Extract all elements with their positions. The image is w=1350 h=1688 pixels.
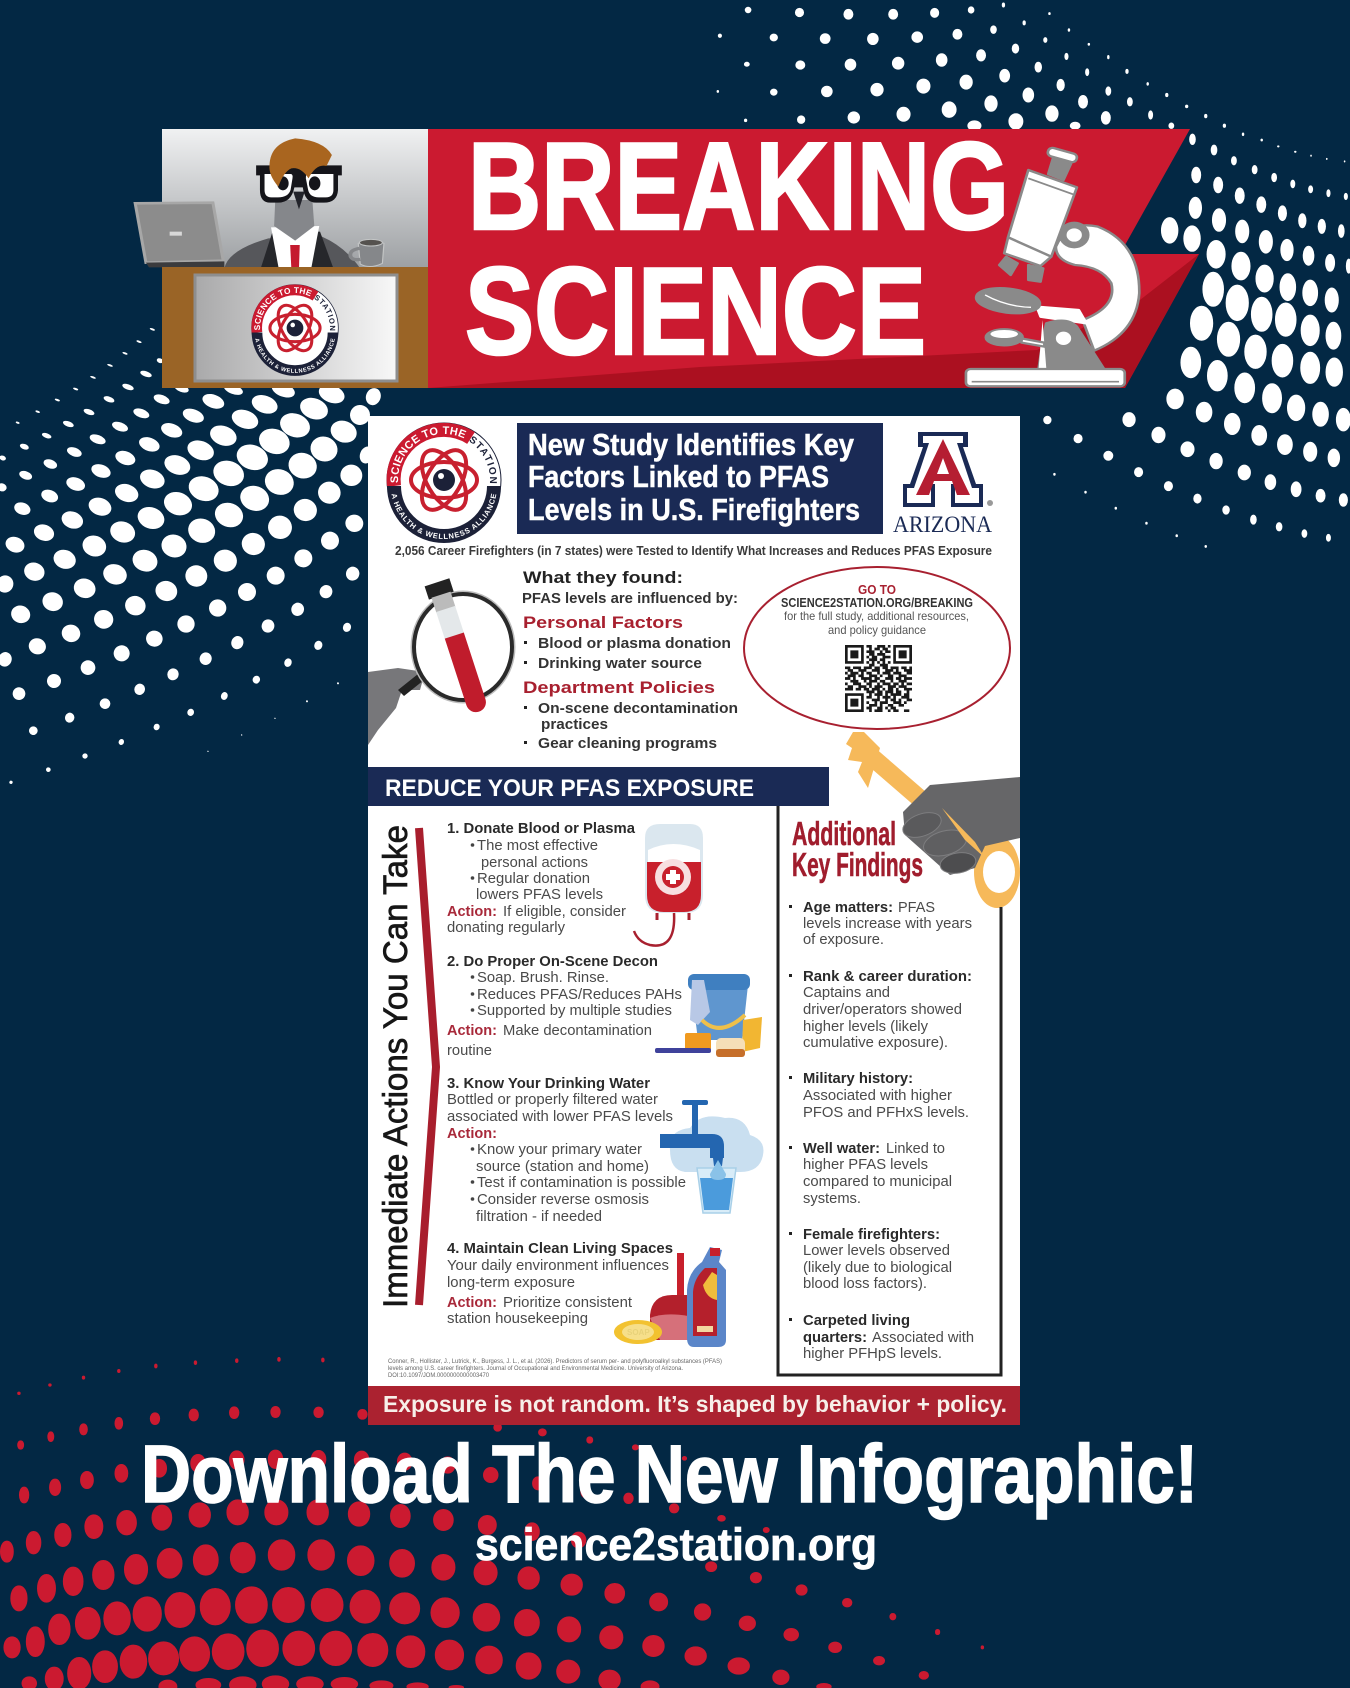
action 2: on-scene decon	[447, 954, 762, 1059]
text: what they found: Blood or plasma donation	[538, 636, 731, 652]
heading: additional key findings: Additional	[792, 815, 896, 852]
wooden desk	[162, 267, 428, 388]
finding: rank and career: Captains and	[803, 985, 890, 1001]
action 1: donate blood: Action:	[447, 904, 497, 920]
text: what they found: Personal Factors	[523, 613, 683, 632]
finding: rank and career	[789, 969, 972, 1051]
callout: go to link with QR	[744, 567, 1010, 729]
callout: go to link with QR: for the full study, additional resources,	[784, 609, 969, 623]
finding: carpeted living quarters	[789, 1313, 974, 1362]
finding: well water: Well water:	[803, 1141, 880, 1157]
finding: military history: Associated with higher	[803, 1088, 952, 1104]
icon: microscope	[966, 147, 1139, 386]
action 3: drinking water: source (station and home)	[476, 1159, 649, 1175]
action 4: clean living spaces: station housekeeping	[447, 1311, 588, 1327]
logo: Science to the Station: A HEALTH & WELLNESS ALLIANCE	[392, 494, 496, 539]
white halftone dots: left cluster	[0, 327, 383, 784]
action 3: drinking water: Consider reverse osmosis	[477, 1192, 649, 1208]
citation: Conner, R., Hollister, J., Lutrick, K., Burgess, J. L., et al. (2026). Predictors of serum per- and polyfluoroalkyl substances (PFAS)	[388, 1359, 722, 1365]
news anchor panel	[133, 129, 428, 388]
action 1: donate blood: donating regularly	[447, 920, 566, 936]
action 2: on-scene decon: 2. Do Proper On-Scene Decon	[447, 954, 658, 970]
action 3: drinking water: 3. Know Your Drinking Water	[447, 1076, 650, 1092]
text: what they found: practices	[541, 717, 608, 733]
white halftone dots: right cluster	[717, 3, 1350, 547]
red banner ribbon	[428, 129, 1199, 388]
action 3: drinking water: associated with lower PFAS levels	[447, 1109, 673, 1125]
text: what they found: On-scene decontamination	[538, 701, 738, 717]
finding: carpeted living quarters: Associated with	[872, 1330, 974, 1346]
logo: Science to the Station: SCIENCE TO THE	[390, 426, 466, 483]
action 3: drinking water: Know your primary water	[477, 1142, 642, 1158]
action 1: donate blood: If eligible, consider	[503, 904, 626, 920]
action 3: drinking water: filtration - if needed	[476, 1209, 602, 1225]
finding: rank and career: higher levels (likely	[803, 1019, 929, 1035]
finding: age matters: levels increase with years	[803, 916, 972, 932]
text: what they found: Department Policies	[523, 678, 715, 697]
logo: University of Arizona: ARIZONA	[893, 512, 992, 537]
icon: blood bag	[634, 824, 703, 946]
text: what they found: PFAS levels are influenced by:	[522, 591, 738, 607]
finding: rank and career: driver/operators showed	[803, 1002, 962, 1018]
action 1: donate blood: 1. Donate Blood or Plasma	[447, 821, 636, 837]
text: what they found: What they found:	[523, 568, 683, 587]
action 4: clean living spaces: long-term exposure	[447, 1275, 575, 1291]
icon: gold key in gray hand	[846, 732, 1020, 908]
finding: well water: compared to municipal	[803, 1174, 952, 1190]
action 3: drinking water: Action:	[447, 1126, 497, 1142]
action 4: clean living spaces	[447, 1241, 726, 1347]
finding: carpeted living quarters: Carpeted living	[803, 1313, 910, 1329]
finding: carpeted living quarters: quarters:	[803, 1330, 867, 1346]
action 3: drinking water	[447, 1076, 763, 1225]
logo: University of Arizona	[893, 432, 993, 537]
infographic card	[368, 416, 1020, 1425]
subtitle: 2,056 Career Firefighters (in 7 states) were Tested to Identify What Increases and Reduces PFAS Exposure	[395, 544, 992, 558]
callout: go to link with QR: SCIENCE2STATION.ORG/BREAKING	[781, 596, 973, 610]
finding: age matters: PFAS	[898, 900, 935, 916]
citation	[388, 1359, 722, 1379]
action 2: on-scene decon: Soap. Brush. Rinse.	[477, 970, 609, 986]
citation: levels among U.S. career firefighters. Journal of Occupational and Environmental Medicine. University of Arizona.	[388, 1366, 683, 1372]
title block: Factors Linked to PFAS	[528, 459, 829, 494]
action 2: on-scene decon: Make decontamination	[503, 1023, 652, 1039]
finding: well water	[789, 1141, 952, 1207]
callout: go to link with QR: GO TO	[858, 583, 896, 597]
text: what they found: Drinking water source	[538, 656, 702, 672]
icon: cleaning products: SOAP	[627, 1328, 650, 1337]
finding: well water: higher PFAS levels	[803, 1157, 928, 1173]
action 2: on-scene decon: Supported by multiple studies	[477, 1003, 672, 1019]
finding: female firefighters: Lower levels observed	[803, 1243, 950, 1259]
icon: pigeon news anchor with laptop and mug	[135, 138, 384, 268]
title block: Levels in U.S. Firefighters	[528, 492, 860, 527]
QR code	[845, 645, 912, 712]
finding: age matters: Age matters:	[803, 900, 893, 916]
icon: bucket and cleaning supplies	[655, 974, 762, 1057]
action 2: on-scene decon: Action:	[447, 1023, 497, 1039]
finding: rank and career: cumulative exposure).	[803, 1035, 948, 1051]
text: what they found	[522, 568, 738, 752]
logo: Science to the Station on desk: STATION	[314, 295, 336, 330]
vertical heading: Immediate Actions You Can Take	[377, 825, 415, 1308]
finding: carpeted living quarters: higher PFHpS levels.	[803, 1346, 942, 1362]
finding: female firefighters: (likely due to biological	[803, 1260, 952, 1276]
action 4: clean living spaces: 4. Maintain Clean Living Spaces	[447, 1241, 673, 1257]
heading: additional key findings	[792, 815, 923, 883]
finding: female firefighters: blood loss factors).	[803, 1276, 927, 1292]
finding: military history: Military history:	[803, 1071, 913, 1087]
action 3: drinking water: Bottled or properly filtered water	[447, 1092, 658, 1108]
title block	[517, 423, 883, 534]
red halftone dots: bottom left cluster	[1, 1357, 983, 1688]
footer bar: Exposure is not random. It’s shaped by behavior + policy.	[383, 1391, 1007, 1417]
icon: faucet and glass of water	[660, 1100, 763, 1213]
action 3: drinking water: Test if contamination is possible	[477, 1175, 686, 1191]
website url: science2station.org	[475, 1519, 877, 1570]
title block: New Study Identifies Key	[528, 427, 855, 462]
action 2: on-scene decon: Reduces PFAS/Reduces PAHs	[477, 987, 682, 1003]
footer bar	[368, 1386, 1020, 1425]
action 1: donate blood: personal actions	[481, 855, 588, 871]
heading: additional key findings: Key Findings	[792, 846, 923, 883]
finding: female firefighters	[789, 1227, 952, 1292]
banner title: SCIENCE: SCIENCE	[465, 243, 926, 381]
banner title: BREAKING: BREAKING	[468, 118, 1009, 256]
action 4: clean living spaces: Prioritize consistent	[503, 1295, 632, 1311]
desk plaque	[195, 275, 397, 381]
action 1: donate blood	[447, 821, 703, 946]
action 1: donate blood: lowers PFAS levels	[476, 887, 603, 903]
logo: Science to the Station on desk: SCIENCE TO THE	[254, 287, 312, 330]
action 1: donate blood: The most effective	[477, 838, 598, 854]
icon: cleaning products	[614, 1247, 726, 1347]
finding: military history	[789, 1071, 969, 1121]
callout: go to link with QR: and policy guidance	[828, 623, 926, 637]
logo: Science to the Station	[386, 422, 502, 543]
finding: age matters	[789, 900, 972, 948]
section heading bar	[368, 767, 829, 806]
arrow: red chevron	[419, 828, 436, 1305]
section heading bar: REDUCE YOUR PFAS EXPOSURE	[385, 775, 754, 802]
finding: well water: systems.	[803, 1191, 861, 1207]
logo: Science to the Station: STATION	[470, 436, 497, 484]
studio backdrop	[162, 129, 428, 268]
text: what they found: Gear cleaning programs	[538, 736, 717, 752]
action 4: clean living spaces: Action:	[447, 1295, 497, 1311]
logo: Science to the Station on desk: A HEALTH & WELLNESS ALLIANCE	[255, 338, 335, 373]
action 4: clean living spaces: Your daily environment influences	[447, 1258, 669, 1274]
action 1: donate blood: Regular donation	[477, 871, 590, 887]
action 2: on-scene decon: routine	[447, 1043, 492, 1059]
icon: hand with magnifier over test tube	[368, 578, 514, 745]
finding: female firefighters: Female firefighters:	[803, 1227, 940, 1243]
citation: DOI:10.1097/JOM.0000000000003470	[388, 1373, 490, 1379]
panel: additional key findings	[778, 806, 1001, 1375]
finding: well water: Linked to	[886, 1141, 945, 1157]
finding: military history: PFOS and PFHxS levels.	[803, 1105, 969, 1121]
finding: age matters: of exposure.	[803, 932, 884, 948]
finding: rank and career: Rank & career duration:	[803, 969, 972, 985]
logo: Science to the Station on desk	[251, 284, 339, 376]
